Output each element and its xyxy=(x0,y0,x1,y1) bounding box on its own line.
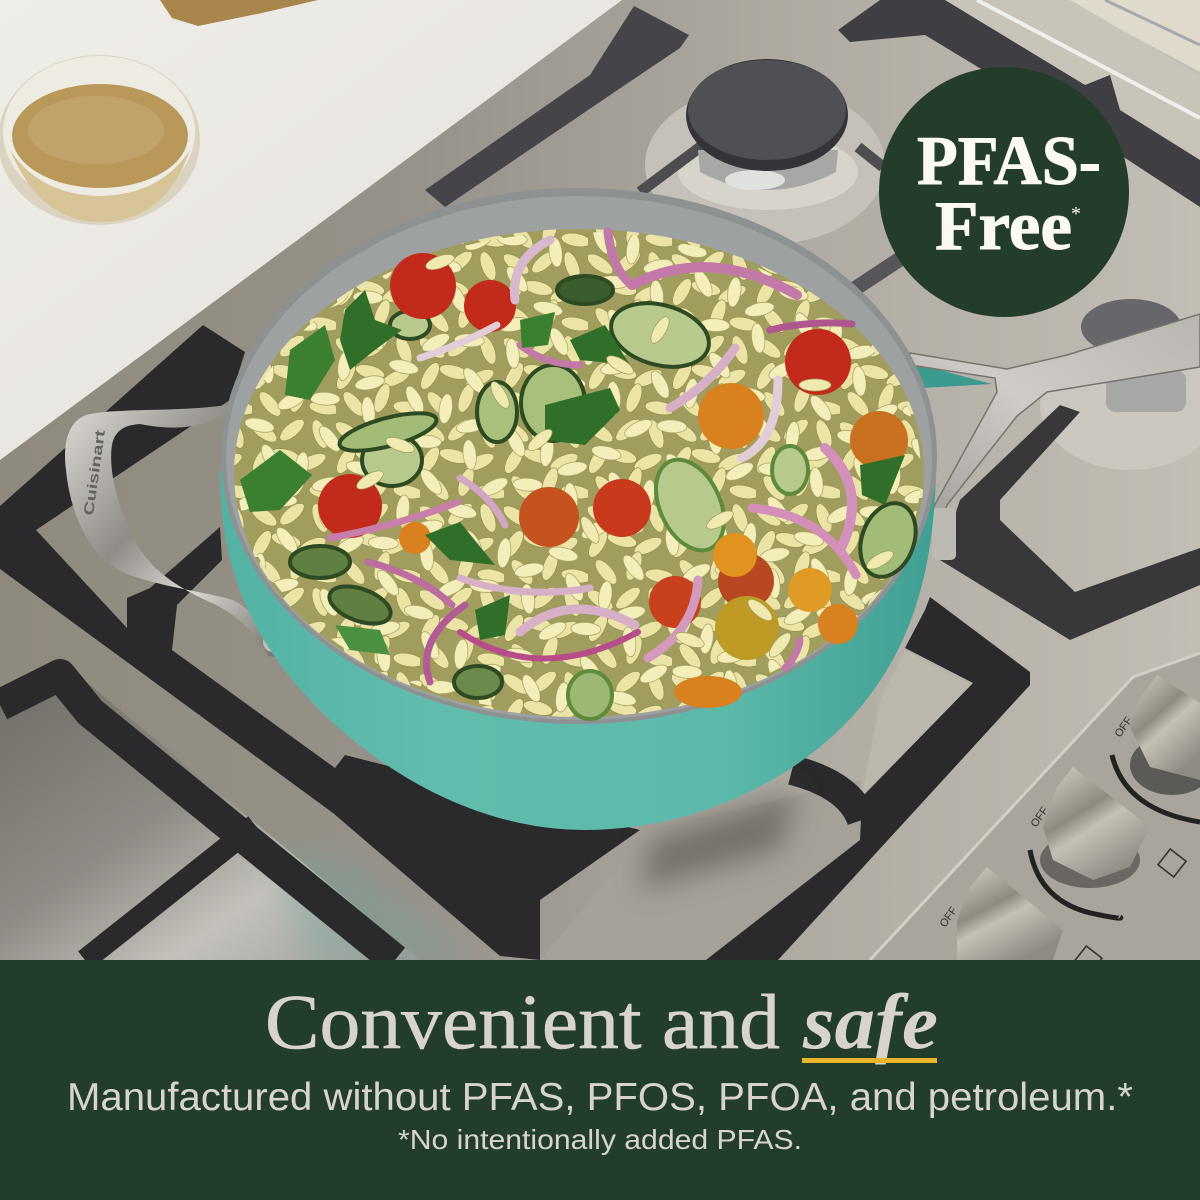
grate: main under pan xyxy=(0,325,1030,960)
glass bowl of dressing xyxy=(0,55,200,225)
badge: PFAS-Free: * xyxy=(1071,203,1081,225)
burner icons xyxy=(1074,849,1186,974)
dial labels: OFF xyxy=(938,905,960,930)
red tomatoes xyxy=(318,253,851,628)
dial labels xyxy=(938,715,1135,930)
burner: top centre xyxy=(640,59,903,290)
wooden board corner xyxy=(160,0,318,26)
food: orzo salad xyxy=(234,229,925,719)
burner: right xyxy=(1040,299,1200,470)
shadow under pan xyxy=(640,790,800,890)
grate: upper back left xyxy=(425,6,689,207)
knob 3 xyxy=(957,867,1063,960)
heading: Convenient and xyxy=(265,978,780,1065)
steel under pan xyxy=(540,650,972,960)
grate: right xyxy=(940,405,1200,640)
towel top right xyxy=(1065,0,1200,72)
pan: right handle xyxy=(910,314,1200,560)
badge: PFAS-Free: PFAS- xyxy=(917,123,1101,200)
pan: left handle: Cuisinart xyxy=(80,429,108,516)
orange and yellow tomatoes xyxy=(399,383,908,708)
heading underline xyxy=(802,1058,937,1063)
teal reflection on steel xyxy=(265,850,470,960)
subheading: Manufactured without PFAS, PFOS, PFOA, and petroleum.* xyxy=(67,1076,1133,1119)
white countertop xyxy=(0,0,622,460)
dial labels: OFF xyxy=(1113,715,1135,740)
heading: safe xyxy=(802,978,938,1065)
back rail right xyxy=(945,0,1200,165)
control panel with knobs xyxy=(870,653,1200,974)
badge: PFAS-Free xyxy=(879,67,1129,317)
pan: left handle xyxy=(65,405,285,658)
badge: PFAS-Free: Free xyxy=(935,188,1072,265)
orzo pieces on top of vegetables xyxy=(354,251,896,660)
red onion strips xyxy=(330,232,856,682)
cilantro leaves xyxy=(240,290,905,655)
knob 1 xyxy=(1130,675,1200,795)
pan: teal body xyxy=(220,460,936,830)
footnote: *No intentionally added PFAS. xyxy=(398,1124,802,1155)
lower left steel panel xyxy=(0,660,420,960)
knob 2 xyxy=(1040,767,1150,888)
bottom banner xyxy=(0,960,1200,1200)
cucumbers xyxy=(290,276,925,719)
dial markings xyxy=(1030,755,1200,918)
grate: upper back right xyxy=(838,0,1200,207)
grate: lower left xyxy=(0,675,395,960)
dial labels: OFF xyxy=(1029,805,1051,830)
stainless cooktop background xyxy=(0,0,1200,960)
pan: rim and interior xyxy=(221,188,937,724)
